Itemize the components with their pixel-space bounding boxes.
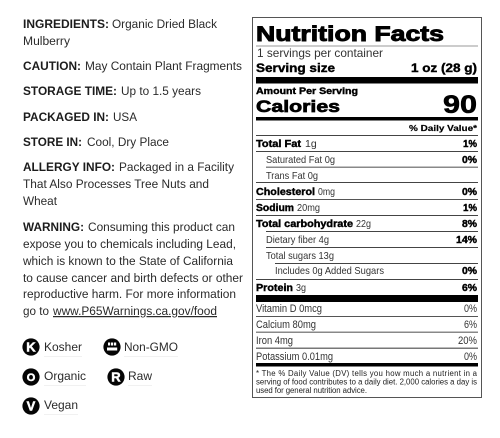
row: cholesterol: 0mg [318,186,335,198]
allergy info: That Also Processes Tree Nuts and [23,177,209,191]
row: dietary fiber [266,234,477,246]
row: protein: 6% [462,283,477,294]
calories: Amount Per Serving [256,86,358,96]
allergy info [23,160,235,208]
ingredients [23,17,218,48]
row: total carbohydrate [256,218,477,230]
servings [256,46,477,75]
warning: reproductive harm. For more information [23,287,236,301]
servings: 1 servings per container [257,46,383,60]
warning: which is known to the State of California [22,254,233,268]
panel: nutrition facts label [252,18,482,398]
row: dietary fiber: Dietary fiber 4g [266,234,329,246]
packaged in: PACKAGED IN: [23,110,109,124]
store in: Cool, Dry Place [87,135,169,149]
ingredients: Organic Dried Black [112,17,218,31]
calories: 90 [443,91,477,119]
badge: Kosher: K [26,340,36,354]
row: protein [256,282,477,294]
ingredients: Mulberry [23,34,71,48]
row: sodium: 20mg [297,202,320,214]
badge: Kosher [22,338,82,357]
row: vitamin D: 0% [464,303,477,315]
row: protein: Protein [256,283,293,294]
row: dietary fiber: 14% [456,235,477,246]
servings: Serving size [256,61,335,75]
row: vitamin D: Vitamin D 0mcg [256,303,322,315]
panel border [252,18,482,398]
badge: Vegan [22,397,78,415]
daily value header: % Daily Value* [409,123,478,133]
row: saturated fat [266,154,477,166]
badge: Non-GMO [103,338,178,357]
row: total carbohydrate: 22g [356,218,371,230]
footnote: * The % Daily Value (DV) tells you how much a nutrient in a [256,369,478,378]
row: sodium [256,202,477,214]
title: Nutrition Facts [256,23,444,46]
badge: Kosher: Kosher [44,340,82,354]
row: total fat [256,138,477,150]
warning [22,220,243,318]
badge: Vegan: Vegan [44,398,78,412]
badge: Raw: Raw [128,369,152,383]
row: potassium [256,351,477,363]
row: total carbohydrate: Total carbohydrate [256,219,353,230]
row: protein: 3g [296,282,306,294]
footnote: serving of food contributes to a daily diet. 2,000 calories a day is [256,378,477,386]
row: saturated fat: 0% [462,155,477,166]
packaged in: USA [113,110,138,124]
caution: CAUTION: [23,59,81,73]
row: total sugars: Total sugars 13g [266,250,334,262]
left column: product information [22,17,243,318]
row: cholesterol: 0% [462,187,477,198]
servings: 1 oz (28 g) [411,61,477,75]
row: vitamin D [256,303,477,315]
warning: to cause cancer and birth defects or other [23,271,243,285]
badge: Raw: R [111,370,121,384]
warning: www.P65Warnings.ca.gov/food [52,304,217,318]
calories [256,86,477,119]
row: calcium [256,319,477,331]
badge: Organic: O [27,372,36,384]
warning: WARNING: [23,220,84,234]
badge: Vegan: V [27,398,36,414]
row: potassium: Potassium 0.01mg [256,351,333,363]
badge: Raw [107,368,152,386]
store in: STORE IN: [23,135,82,149]
warning: Consuming this product can [88,220,235,234]
row: cholesterol: Cholesterol [256,187,315,198]
row: added sugars: Includes 0g Added Sugars [275,265,384,277]
row: iron: 20% [458,335,477,347]
row: sodium: 1% [463,203,477,214]
row: total fat: 1% [463,139,477,150]
badge: Organic: Organic [44,369,86,383]
row: iron: Iron 4mg [256,335,293,347]
badge: Non-GMO: Non-GMO [124,340,178,354]
allergy info: ALLERGY INFO: [23,160,115,174]
allergy info: Wheat [23,194,58,208]
row: potassium: 0% [464,351,477,363]
storage time: STORAGE TIME: [23,84,117,98]
storage time [23,84,201,98]
footnote [256,369,478,395]
footnote: used for general nutrition advice. [256,386,367,395]
row: cholesterol [256,186,477,198]
ingredients: INGREDIENTS: [23,17,109,31]
row: calcium: 6% [464,319,477,331]
row: trans fat: Trans Fat 0g [266,170,318,182]
store in [23,135,169,149]
caution [23,59,242,73]
allergy info: Packaged in a Facility [119,160,235,174]
row: added sugars [275,265,477,277]
warning: go to [23,304,49,318]
caution: May Contain Plant Fragments [85,59,242,73]
calories: Calories [256,97,340,116]
warning: expose you to chemicals including Lead, [23,237,236,251]
row: total fat: Total Fat [256,139,302,150]
badge: Organic [22,368,86,386]
storage time: Up to 1.5 years [121,84,201,98]
row: calcium: Calcium 80mg [256,319,316,331]
row: sodium: Sodium [256,203,294,214]
row: added sugars: 0% [462,266,477,277]
row: total fat: 1g [305,138,317,150]
row: saturated fat: Saturated Fat 0g [266,154,335,166]
row: iron [256,335,477,347]
row: total carbohydrate: 8% [462,219,477,230]
